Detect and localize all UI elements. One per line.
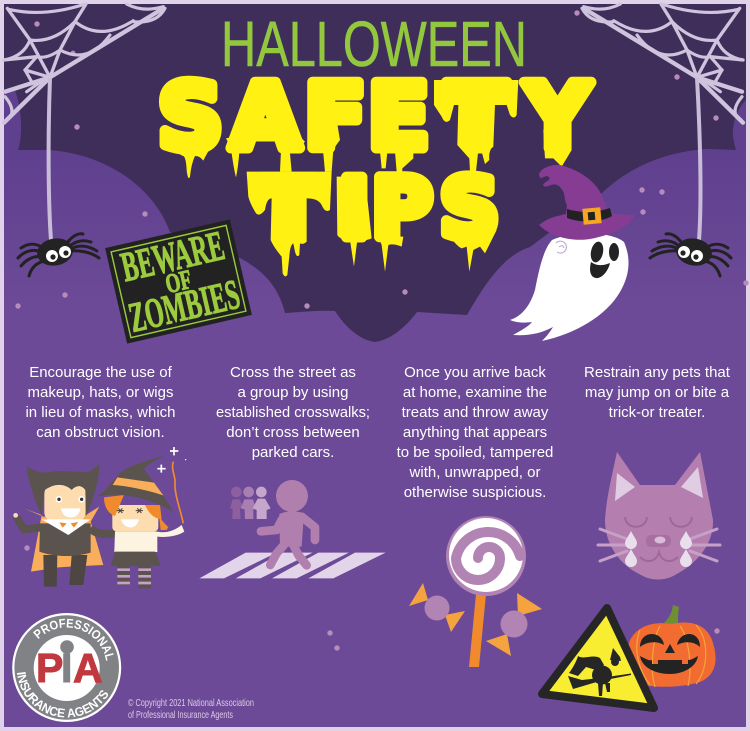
cat tears — [625, 531, 692, 567]
hat band — [567, 208, 612, 222]
title: Safety: SAFETY — [158, 65, 592, 170]
cat mouth — [640, 552, 678, 561]
copyright note — [128, 698, 254, 721]
vampire eyes and mouth — [56, 496, 62, 503]
wand — [173, 462, 183, 523]
lollipop — [446, 516, 526, 596]
sign: beware of zombies: OF — [162, 264, 195, 299]
vampire torso — [39, 523, 91, 556]
witch on broomstick silhouette — [568, 648, 631, 696]
ghost face — [589, 240, 619, 278]
tip 4 text: may jump on or bite a — [585, 384, 730, 401]
tip 2 text: don’t cross between — [226, 424, 360, 441]
spider left on thread — [18, 78, 99, 276]
witch face — [112, 505, 158, 532]
witch eyes and mouth — [117, 508, 143, 513]
lollipop stick — [469, 594, 486, 667]
pumpkin body — [627, 623, 716, 687]
left wrapped candy — [409, 583, 465, 632]
witch legs — [117, 565, 130, 585]
tip 4 text: Restrain any pets that — [584, 364, 731, 381]
ghost with witch hat — [510, 165, 635, 341]
sign: beware of zombies: ZOMBIES — [125, 272, 244, 342]
vampire cape — [24, 507, 103, 572]
pumpkin ribs — [637, 625, 706, 687]
cat inner ears — [615, 467, 703, 501]
tip 1 text: in lieu of masks, which — [25, 404, 176, 421]
vampire bow — [59, 522, 78, 528]
ghost ear — [556, 241, 566, 253]
cat whiskers — [598, 529, 720, 561]
tip 3 text: to be spoiled, tampered — [397, 444, 553, 461]
tip 1 text: can obstruct vision. — [36, 424, 165, 441]
slime drips, left half — [173, 120, 372, 276]
sparkles — [157, 447, 178, 473]
tip 2 text: established crosswalks; — [216, 404, 370, 421]
vampire hand — [13, 513, 18, 518]
tip 3 text: with, unwrapped, or — [409, 464, 540, 481]
witch skirt — [111, 552, 161, 566]
slime drips, right half — [375, 80, 572, 272]
tip 2 text: Cross the street as — [230, 364, 356, 381]
title: Tips: TIPS — [260, 162, 499, 257]
kids in costume: vampire and witch — [13, 447, 186, 588]
crying cat face — [598, 452, 720, 580]
pedestrian — [261, 480, 315, 565]
logo dot — [60, 640, 74, 654]
pumpkin face — [640, 634, 700, 674]
spider right on thread — [650, 78, 731, 276]
crosswalk scene — [199, 480, 386, 578]
witch hat — [539, 165, 635, 240]
vampire hair — [27, 464, 99, 516]
copyright note: of Professional Insurance Agents — [128, 710, 233, 721]
logo ring text top: PROFESSIONAL — [33, 618, 114, 661]
logo ring text bottom: INSURANCE AGENTS — [17, 672, 108, 718]
PIA logo — [12, 613, 122, 722]
dark night sky with bat-shaped cloud edge — [4, 4, 746, 342]
cobweb right — [582, 4, 743, 123]
cat nose — [646, 535, 671, 547]
crosswalk stripes — [199, 553, 386, 578]
witch shirt and arm — [114, 525, 184, 552]
vampire face — [44, 482, 86, 522]
sign: beware of zombies: BEWARE — [117, 223, 229, 291]
cat eyes — [625, 517, 692, 527]
tip 3 text: otherwise suspicious. — [404, 484, 546, 501]
ghost body — [510, 233, 629, 341]
hat buckle — [582, 207, 602, 225]
copyright note: © Copyright 2021 National Association — [128, 698, 254, 709]
tip 4 text — [584, 364, 731, 421]
tip 3 text: treats and throw away — [402, 404, 549, 421]
logo PIA mark: PIA — [36, 645, 103, 691]
cobweb left — [4, 4, 165, 123]
vampire legs — [43, 555, 87, 587]
vampire shirt — [42, 519, 91, 535]
tip 3 text: Once you arrive back — [404, 364, 546, 381]
tip 1 text: makeup, hats, or wigs — [28, 384, 173, 401]
witch hair — [104, 495, 171, 530]
tip 4 text: trick-or treater. — [609, 404, 705, 421]
tip 2 text: a group by using — [238, 384, 348, 401]
tip 1 text — [25, 364, 176, 441]
tip 2 text — [216, 364, 370, 461]
group of children — [230, 487, 271, 519]
pumpkin stem — [664, 605, 679, 625]
witch hat band — [113, 477, 163, 495]
witch hat — [97, 456, 173, 512]
tip 1 text: Encourage the use of — [29, 364, 173, 381]
right wrapped candy — [486, 593, 542, 656]
candy group — [409, 516, 542, 667]
tip 3 text: at home, examine the — [403, 384, 547, 401]
jack-o-lantern — [627, 605, 716, 687]
tip 3 text — [397, 364, 553, 501]
vampire arms — [17, 517, 42, 529]
title: Halloween: HALLOWEEN — [221, 8, 527, 80]
sign: beware of zombies — [105, 219, 252, 344]
tip 3 text: anything that appears — [403, 424, 547, 441]
warning sign with witch silhouette — [542, 608, 654, 708]
tip 2 text: parked cars. — [252, 444, 334, 461]
